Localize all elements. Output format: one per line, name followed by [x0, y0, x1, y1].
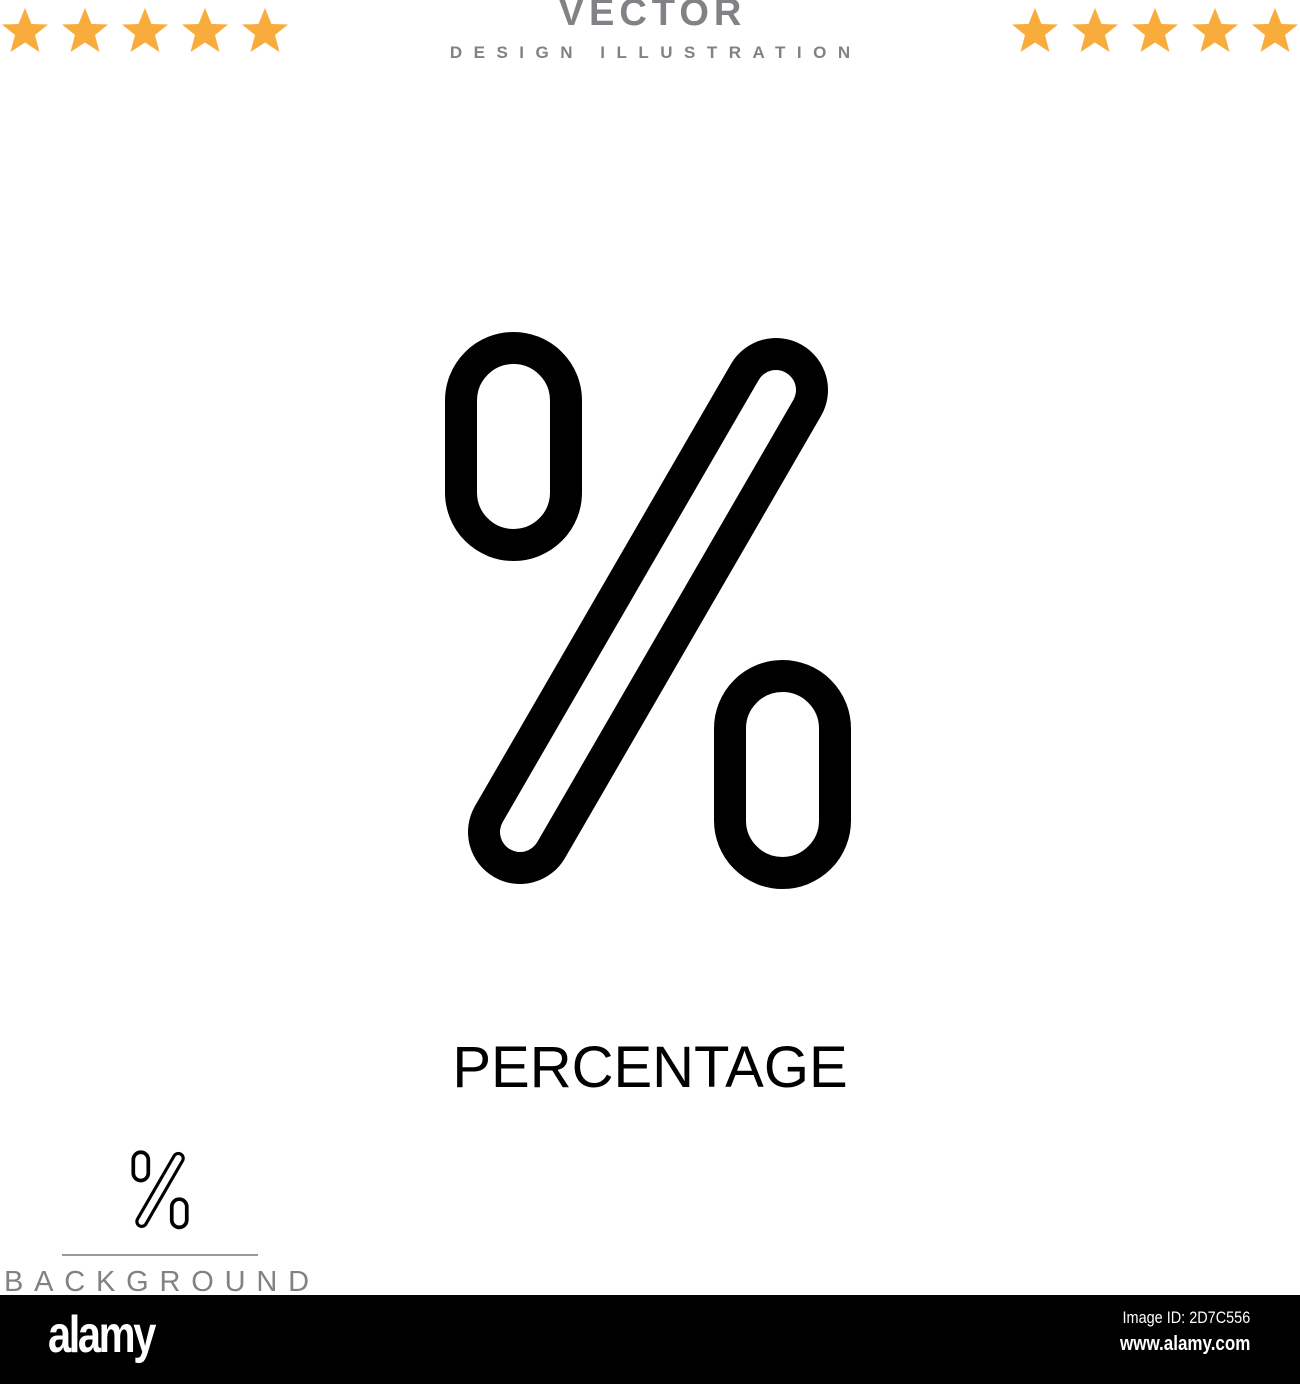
footer bar [0, 1295, 1300, 1384]
stars right [1012, 8, 1298, 52]
subtitle: DESIGN ILLUSTRATION [450, 43, 862, 62]
icon: percentage main [445, 332, 851, 889]
image id: Image ID: 2D7C556 [1122, 1308, 1250, 1327]
stars left [2, 8, 288, 52]
icon: small percentage [131, 1150, 189, 1230]
text: BACKGROUND: BACKGROUND [4, 1266, 320, 1298]
url: www.alamy.com [1120, 1333, 1250, 1355]
label: PERCENTAGE: PERCENTAGE [452, 1035, 848, 1100]
logo: alamy: alamy [48, 1306, 154, 1364]
